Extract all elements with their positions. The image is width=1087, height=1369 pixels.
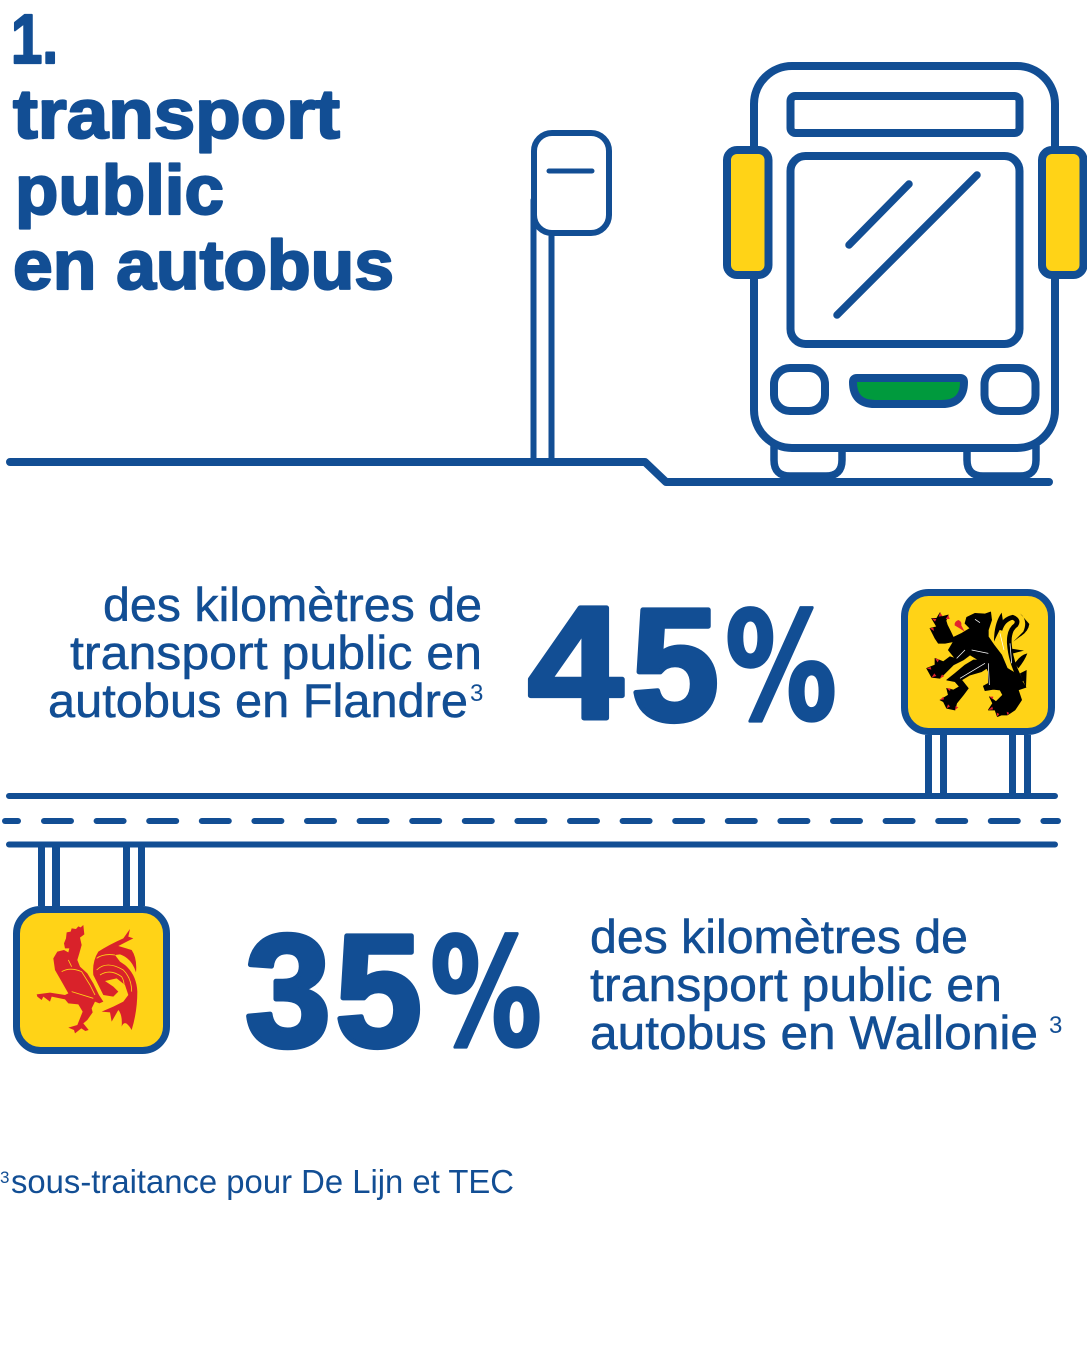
stat: 35%: % (430, 907, 542, 1081)
lion claws (927, 613, 1009, 717)
stat: 45% (528, 573, 837, 755)
road with dashed centre line (5, 796, 1058, 844)
icon: Wallonia road sign with rooster (16, 847, 166, 1050)
title: en autobus (13, 226, 394, 304)
left mirror (727, 150, 768, 275)
green grille (853, 378, 964, 404)
text: Wallonia share: 3 (1049, 1012, 1062, 1039)
destination panel (790, 96, 1020, 133)
text: Flanders share: des kilomètres de (103, 578, 482, 631)
title: 1. (11, 0, 58, 78)
text: Wallonia share (590, 910, 1062, 1059)
bus wheels (774, 446, 1036, 476)
text: Flanders share: autobus en Flandre (48, 674, 468, 727)
stat: 45%: % (725, 581, 837, 755)
icon: bus front (727, 66, 1084, 476)
icon: bus stop sign (534, 133, 609, 460)
lion highlights (957, 619, 1012, 685)
text: Wallonia share: autobus en Wallonie (590, 1006, 1038, 1059)
lion tail (1000, 617, 1022, 682)
windshield glare lines (837, 175, 977, 315)
stat: 45%: 5 (631, 575, 719, 754)
text: Flanders share: transport public en (70, 626, 482, 679)
title (11, 0, 394, 304)
stat: 35%: 3 (245, 901, 331, 1080)
windshield (790, 156, 1020, 344)
stat: 35%: 5 (335, 901, 422, 1080)
lion (927, 612, 1029, 717)
text: Flanders share (48, 578, 483, 727)
bus body (754, 66, 1055, 448)
left headlight (774, 368, 825, 411)
lion tongue (955, 620, 965, 632)
text: Wallonia share: des kilomètres de (590, 910, 968, 963)
text: Flanders share: 3 (470, 680, 483, 707)
text: Wallonia share: transport public en (590, 958, 1002, 1011)
right mirror (1042, 150, 1084, 275)
rooster (37, 925, 137, 1033)
title: public (15, 151, 224, 229)
road under bus stop and bus (10, 462, 1049, 482)
right headlight (984, 368, 1036, 411)
footnote: 3 (0, 1168, 9, 1187)
footnote: sous-traitance pour De Lijn et TEC (11, 1163, 514, 1200)
icon: Flanders road sign with lion (904, 592, 1052, 796)
stat: 45%: 4 (528, 573, 623, 752)
title: transport (13, 75, 340, 153)
stat: 35% (245, 901, 542, 1081)
